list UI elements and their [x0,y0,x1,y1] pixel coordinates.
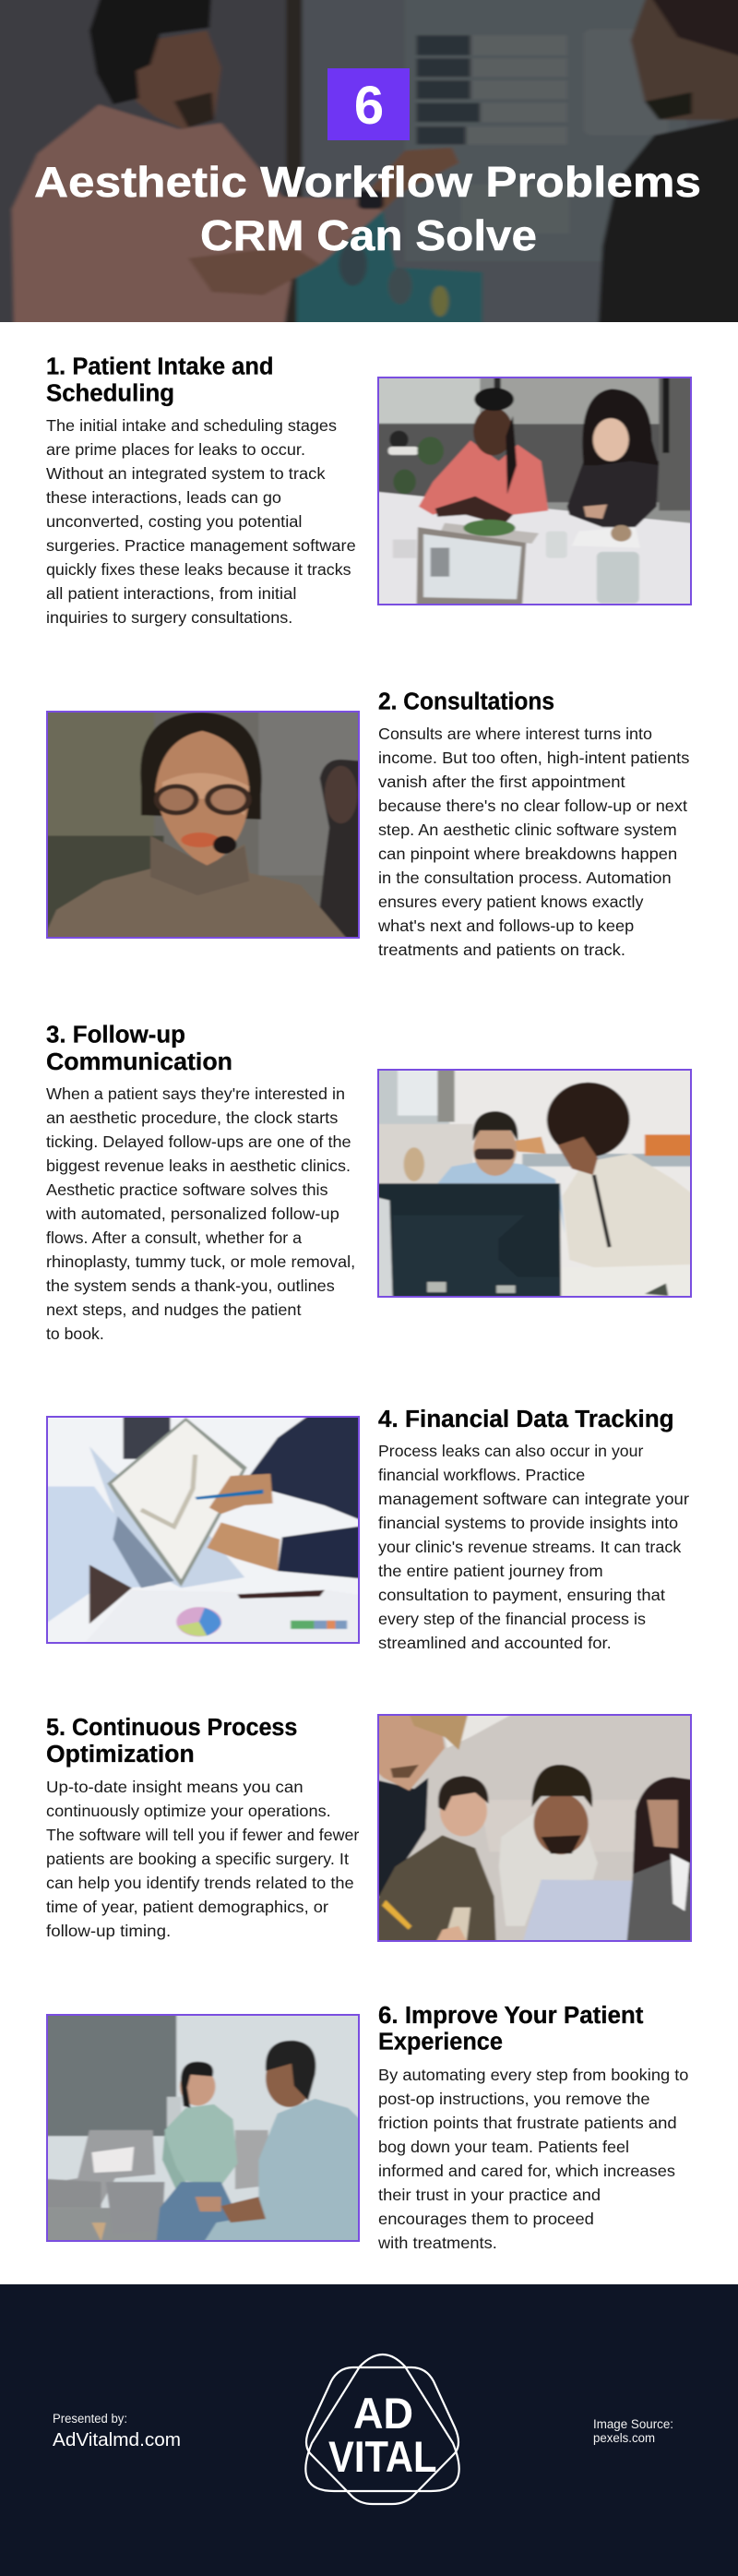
heading 5: 5. Continuous Process [46,1715,297,1741]
presented by: AdVitalmd.com [53,2430,181,2450]
body text 5: Up-to-date insight means you can [46,1778,304,1796]
body text 2: ensures every patient knows exactly [378,893,644,911]
body text 1: surgeries. Practice management software [46,536,356,555]
body text 1: inquiries to surgery consultations. [46,608,292,627]
photo 4: hands pointing at a chart on a laptop [33,1404,372,1654]
body text 3: flows. After a consult, whether for a [46,1228,302,1247]
heading 6: 6. Improve Your Patient [378,2003,644,2029]
header banner [0,0,738,335]
body text 4: every step of the financial process is [378,1610,646,1628]
body text 3: rhinoplasty, tummy tuck, or mole removal, [46,1252,355,1271]
body text 6: their trust in your practice and [378,2186,601,2204]
body text 1: all patient interactions, from initial [46,584,296,603]
photo 5: team gathered around a laptop [367,1704,706,1952]
body text 4: financial systems to provide insights into [378,1514,678,1532]
heading 1: Scheduling [46,380,174,406]
body text 1: Without an integrated system to track [46,464,326,483]
body text 5: patients are booking a specific surgery. It [46,1850,349,1868]
body text 3: an aesthetic procedure, the clock starts [46,1108,339,1127]
body text 4: Process leaks can also occur in your [378,1442,644,1460]
body text 6: informed and cared for, which increases [378,2162,675,2180]
body text 3: biggest revenue leaks in aesthetic clinics. [46,1156,351,1175]
section 2: consultations [33,689,690,959]
body text 2: because there's no clear follow-up or next [378,797,687,815]
section 5: continuous process optimization [46,1704,706,1952]
title: CRM Can Solve [200,211,537,259]
body text 1: quickly fixes these leaks because it tracks [46,560,351,579]
body text 3: next steps, and nudges the patient [46,1300,302,1319]
body text 1: The initial intake and scheduling stages [46,416,337,435]
heading 5 [46,1715,297,1767]
section 1: patient intake and scheduling [46,354,706,627]
heading 1 [46,354,273,406]
body text 2: treatments and patients on track. [378,941,625,959]
presented by: Presented by: [53,2412,127,2426]
image source: pexels.com [593,2431,655,2445]
body text 6: encourages them to proceed [378,2210,594,2228]
header background photo: two men at a whiteboard [0,0,738,322]
body text 3: Aesthetic practice software solves this [46,1180,328,1199]
body text 5: continuously optimize your operations. [46,1802,331,1820]
body text 4: your clinic's revenue streams. It can track [378,1538,682,1556]
number badge: 6 [354,76,384,136]
body text 3: ticking. Delayed follow-ups are one of the [46,1132,351,1151]
presented by [53,2412,181,2450]
body text 2: vanish after the first appointment [378,773,625,791]
body text 2: in the consultation process. Automation [378,869,672,887]
body text 3: to book. [46,1324,104,1343]
heading 3: 3. Follow-up [46,1023,185,1048]
body text 1: are prime places for leaks to occur. [46,440,305,459]
body text 6: friction points that frustrate patients and [378,2114,677,2132]
number badge [327,68,410,140]
body text 2: step. An aesthetic clinic software system [378,821,677,839]
body text 4: the entire patient journey from [378,1562,603,1580]
photo 1: two colleagues at a table with laptop [367,366,706,617]
heading 5: Optimization [46,1742,195,1767]
image source [593,2417,673,2445]
title [34,158,701,259]
body text 4: consultation to payment, ensuring that [378,1586,665,1604]
logo: Ad Vital: AD [353,2389,413,2438]
body text 1 [46,416,356,627]
heading 4: 4. Financial Data Tracking [378,1407,674,1432]
body text 2: Consults are where interest turns into [378,725,652,743]
body text 2: can pinpoint where breakdowns happen [378,845,677,863]
heading 1: 1. Patient Intake and [46,354,273,380]
body text 4: financial workflows. Practice [378,1466,585,1484]
section 6: improve your patient experience [33,2003,688,2252]
photo 6: woman talking with clinician [33,2005,372,2252]
body text 4: streamlined and accounted for. [378,1634,612,1652]
body text 5 [46,1778,359,1940]
body text 4 [378,1442,689,1652]
logo: Ad Vital: VITAL [328,2432,437,2481]
body text 3 [45,1084,355,1343]
body text 6: with treatments. [377,2234,497,2252]
body text 6: By automating every step from booking to [378,2066,688,2084]
body text 5: follow-up timing. [46,1922,171,1940]
photo 3: two colleagues behind a monitor [367,1060,706,1307]
body text 2: what's next and follows-up to keep [377,917,634,935]
title: Aesthetic Workflow Problems [34,158,701,206]
logo: Ad Vital [305,2354,459,2504]
body text 3: with automated, personalized follow-up [45,1204,339,1223]
heading 6 [378,2003,644,2055]
image source: Image Source: [593,2417,673,2431]
body text 2 [377,725,690,959]
section 3: follow-up communication [45,1023,706,1343]
heading 2: 2. Consultations [378,689,554,714]
body text 5: The software will tell you if fewer and fewer [46,1826,359,1844]
body text 6: bog down your team. Patients feel [378,2138,629,2156]
heading 3: Communication [46,1049,232,1075]
body text 1: these interactions, leads can go [46,488,281,507]
body text 5: time of year, patient demographics, or [46,1898,328,1916]
section 4: financial data tracking [33,1404,689,1654]
body text 6 [377,2066,688,2252]
body text 2: income. But too often, high-intent patients [378,749,690,767]
heading 6: Experience [378,2029,503,2055]
photo 2: woman with headset [33,700,372,951]
body text 1: unconverted, costing you potential [46,512,303,531]
footer [0,2284,738,2576]
body text 3: the system sends a thank-you, outlines [46,1276,335,1295]
body text 5: can help you identify trends related to the [46,1874,354,1892]
body text 6: post-op instructions, you remove the [378,2090,650,2108]
body text 3: When a patient says they're interested in [46,1084,345,1103]
heading 3 [46,1023,232,1075]
body text 4: management software can integrate your [378,1490,689,1508]
